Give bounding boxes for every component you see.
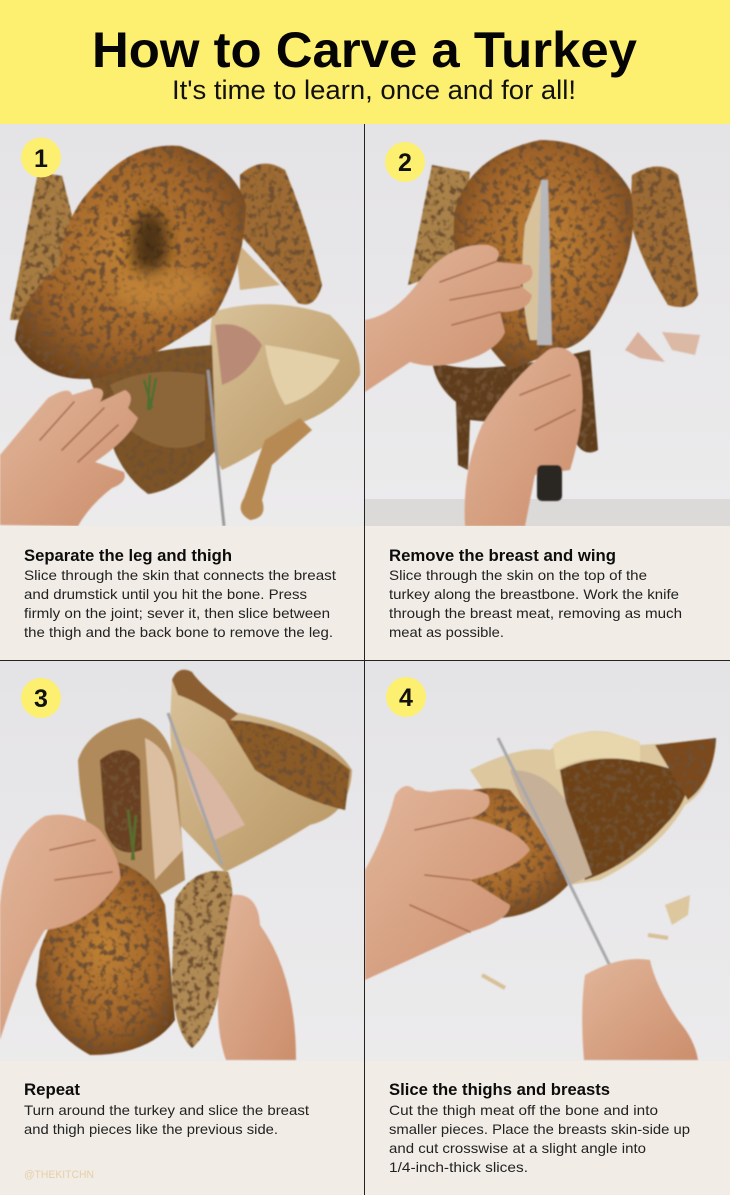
step 2 body: turkey along the breastbone. Work the knife	[389, 586, 679, 602]
step 4 body: and cut crosswise at a slight angle into	[389, 1140, 646, 1156]
step 4 body: Cut the thigh meat off the bone and into	[389, 1102, 658, 1118]
step 2 body: Slice through the skin on the top of the	[389, 567, 647, 583]
step 2 number badge	[385, 142, 425, 182]
header banner	[0, 0, 730, 124]
panel: step 4 photo	[365, 661, 730, 1061]
step 2 body: meat as possible.	[389, 624, 504, 640]
step 4 heading: Slice the thighs and breasts	[389, 1081, 610, 1099]
step 1 number badge	[21, 138, 61, 178]
panel: step 4 caption	[365, 1061, 730, 1195]
step 2 heading: Remove the breast and wing	[389, 547, 616, 565]
step 3 heading: Repeat	[24, 1081, 81, 1099]
icon: left hand	[365, 245, 532, 392]
panel: step 1 photo	[0, 124, 364, 526]
step 4 number badge	[386, 677, 426, 717]
icon: right hand and knife handle	[465, 348, 582, 526]
panel: step 3 caption	[0, 1061, 364, 1195]
panel: step 2 caption	[365, 526, 730, 660]
step 3 number badge: 3	[34, 685, 48, 713]
icon: hand holding the turkey	[0, 388, 138, 526]
step 3 body: Turn around the turkey and slice the breast	[24, 1102, 309, 1118]
step 1 body: firmly on the joint; sever it, then slice between	[24, 605, 330, 621]
step 2 body	[389, 567, 682, 640]
step 1 body: the thigh and the back bone to remove the leg.	[24, 624, 333, 640]
step 3 number badge	[21, 678, 61, 718]
step 1 body: Slice through the skin that connects the breast	[24, 567, 336, 583]
step 3 body: and thigh pieces like the previous side.	[24, 1121, 278, 1137]
step 1 body	[24, 567, 336, 640]
step 1 number badge: 1	[34, 145, 48, 173]
icon: left hand	[0, 815, 120, 1040]
icon: right hand	[218, 895, 296, 1060]
panel: step 1 caption	[0, 526, 364, 660]
panel: step 3 photo	[0, 661, 364, 1061]
step 4 body: 1/4-inch-thick slices.	[389, 1159, 528, 1175]
step 4 number badge: 4	[399, 684, 413, 712]
icon: left hand	[365, 786, 530, 980]
icon: right hand	[582, 959, 698, 1060]
step 1 body: and drumstick until you hit the bone. Press	[24, 586, 307, 602]
step 1 heading: Separate the leg and thigh	[24, 547, 232, 565]
subtitle: It's time to learn, once and for all!	[172, 75, 576, 105]
panel: step 2 photo	[365, 124, 730, 526]
credit: @THEKITCHN	[24, 1169, 94, 1181]
step 3 body	[24, 1102, 309, 1137]
step 4 body: smaller pieces. Place the breasts skin-side up	[389, 1121, 690, 1137]
step 2 body: through the breast meat, removing as much	[389, 605, 682, 621]
step 4 body	[389, 1102, 690, 1175]
title: How to Carve a Turkey	[92, 22, 637, 78]
step 2 number badge: 2	[398, 149, 412, 177]
